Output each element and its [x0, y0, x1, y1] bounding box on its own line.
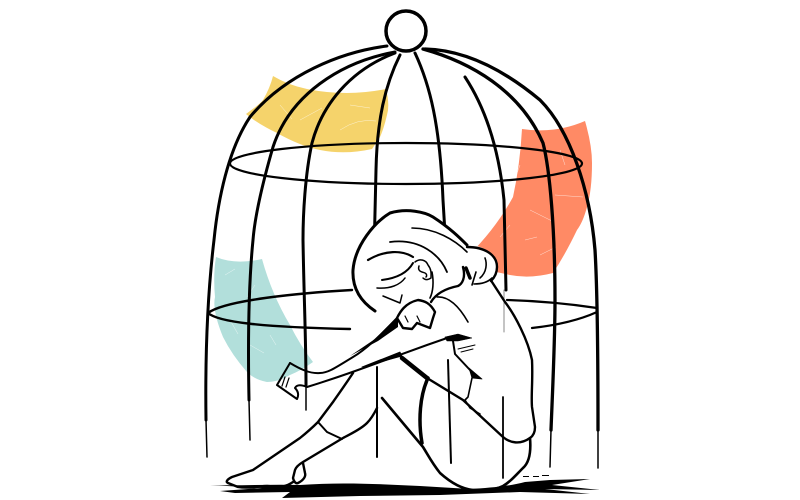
cage: vertical bars [206, 46, 598, 478]
woman: outstretched arm [277, 318, 472, 399]
woman: forearm wedge [350, 316, 398, 356]
woman: ear [415, 260, 431, 280]
woman: upper arm and shoulder [382, 282, 535, 490]
woman: sleeve and armpit [453, 341, 482, 414]
woman: hair silhouette [353, 211, 497, 315]
cage: upper ring [230, 143, 582, 184]
woman: folded legs [227, 358, 428, 488]
yellow paint swatch [246, 76, 388, 152]
woman: hair lines [353, 211, 497, 311]
cage: lower ring [208, 290, 597, 329]
cage: top ring handle [386, 11, 426, 51]
orange paint swatch [466, 121, 592, 277]
teal paint swatch [214, 257, 313, 382]
woman: hand resting on forehead [397, 300, 435, 329]
ground shadow [210, 475, 600, 498]
